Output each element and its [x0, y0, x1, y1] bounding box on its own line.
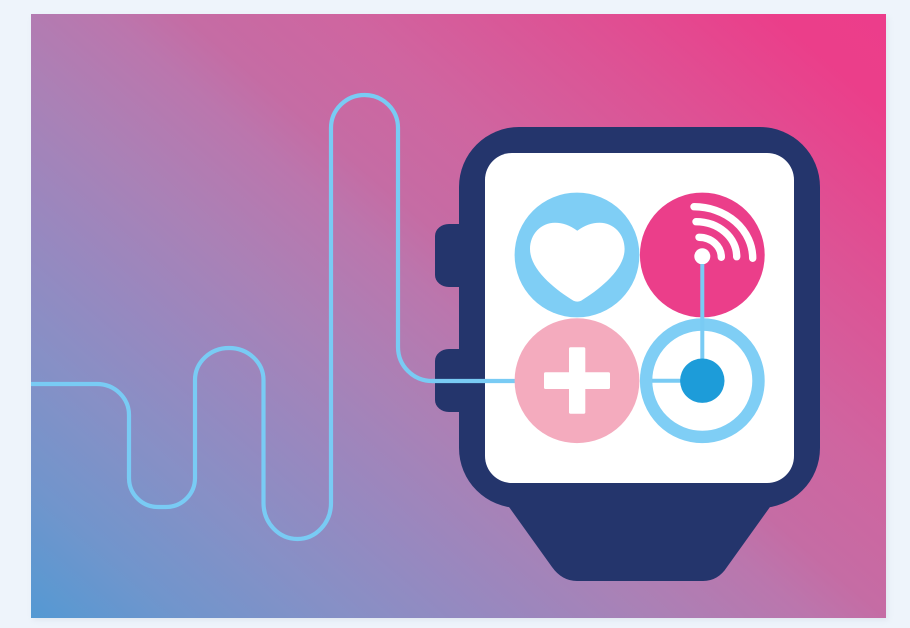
icon: heart	[515, 193, 639, 317]
side button top	[435, 224, 485, 287]
icon: target ring	[646, 264, 758, 437]
icon: medical cross	[515, 318, 639, 443]
smartwatch	[432, 127, 820, 581]
side button bottom	[435, 349, 485, 412]
watch strap	[504, 500, 775, 581]
watch body	[459, 127, 820, 508]
connector line over body	[432, 379, 516, 383]
icon: wifi signal	[640, 193, 765, 317]
watch screen	[485, 153, 794, 483]
pulse line	[31, 95, 516, 539]
